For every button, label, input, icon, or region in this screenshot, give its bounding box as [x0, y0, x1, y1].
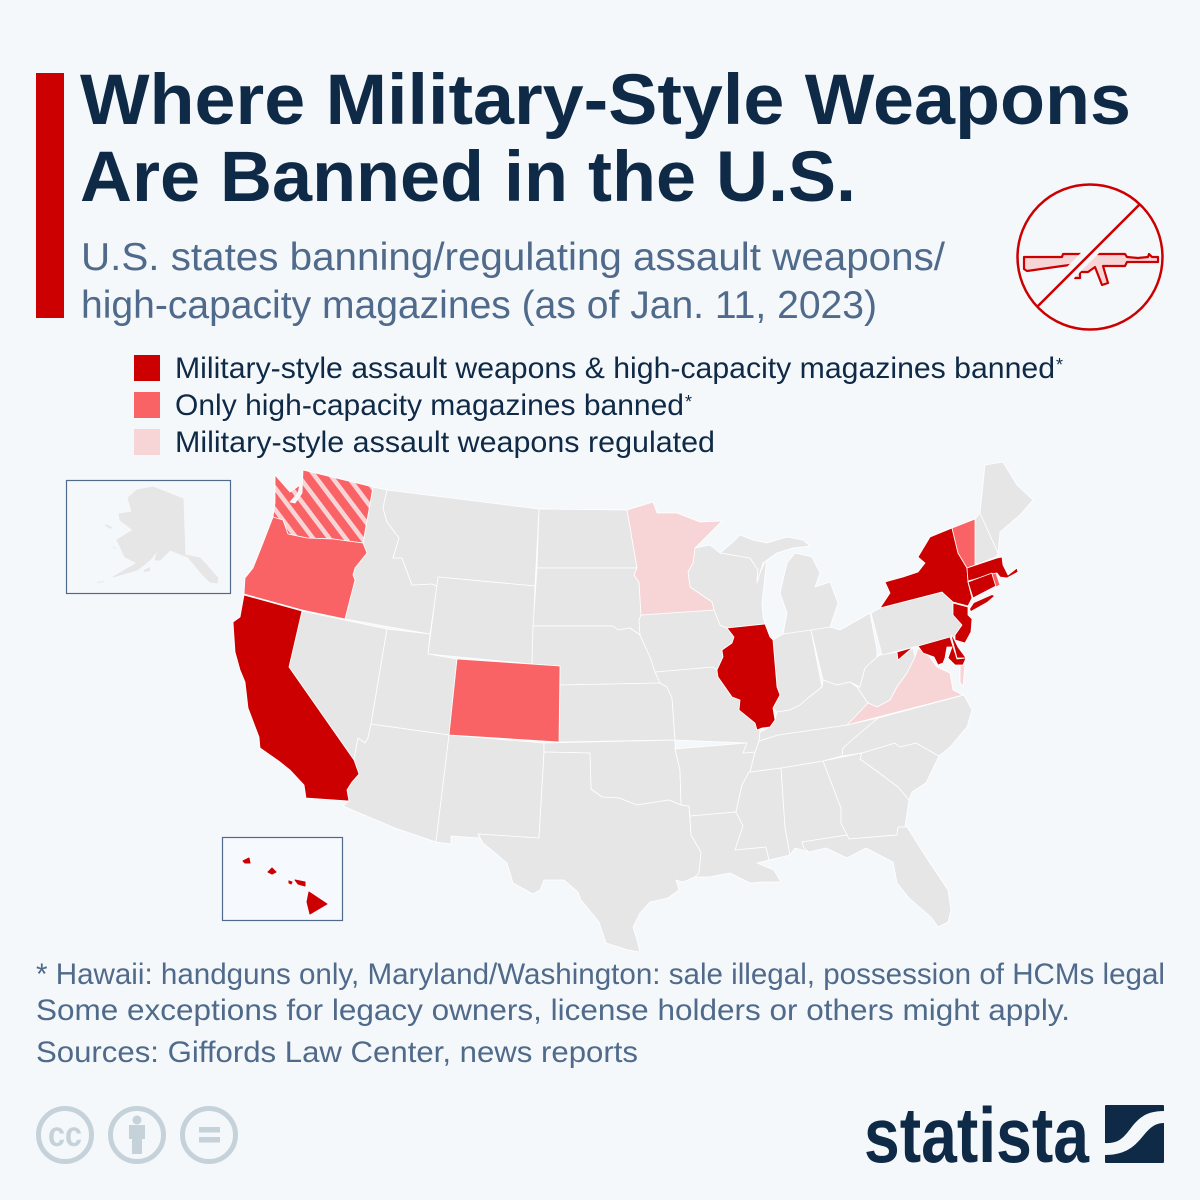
icon: banned rifle: [1018, 184, 1162, 330]
title: Are Banned in the U.S.: [80, 138, 856, 217]
state: Vermont: [952, 519, 975, 568]
title accent bar: [36, 73, 64, 318]
state: Minnesota: [627, 502, 722, 615]
subtitle: high-capacity magazines (as of Jan. 11, 2023): [81, 284, 877, 327]
state: Colorado: [449, 659, 560, 742]
logo: statista: statista: [864, 1091, 1090, 1179]
legend: [134, 352, 1063, 459]
state: New Jersey: [953, 603, 972, 643]
state: Delaware: [951, 635, 966, 658]
Virginia eastern shore: [960, 665, 965, 687]
states without a ban: [289, 462, 1033, 952]
legend item: assault weapons and magazines banned: Military-style assault weapons & high-capacity magazines banned: [175, 352, 1055, 385]
legend item: assault weapons and magazines banned: *: [1056, 355, 1063, 375]
inset: Alaska: [66, 480, 230, 594]
legend item: only magazines banned: Only high-capacity magazines banned: [175, 389, 684, 422]
footnotes: Sources: Giffords Law Center, news reports: [36, 1036, 638, 1069]
title: Where Military-Style Weapons: [80, 61, 1131, 140]
icon: no derivatives: [182, 1108, 236, 1162]
icon: creative commons: [38, 1108, 92, 1162]
subtitle: [81, 236, 945, 327]
map: contiguous United States: [233, 462, 1033, 952]
state: California: [233, 595, 359, 801]
subtitle: U.S. states banning/regulating assault weapons/: [81, 236, 945, 279]
footnotes: Some exceptions for legacy owners, license holders or others might apply.: [36, 994, 1070, 1027]
state: Washington (hatched): [273, 470, 373, 543]
Long Island: [970, 595, 994, 611]
footnotes: * Hawaii: handguns only, Maryland/Washington: sale illegal, possession of HCMs legal: [36, 958, 1165, 991]
state: Rhode Island: [992, 573, 1000, 587]
state: New York: [880, 528, 972, 608]
footnotes: [36, 958, 1165, 1069]
state: Illinois: [717, 624, 780, 730]
state: Virginia: [847, 648, 963, 725]
state: Connecticut: [968, 573, 996, 598]
icon: creative commons: cc: [48, 1115, 82, 1154]
legend item: assault weapons regulated: Military-style assault weapons regulated: [175, 426, 715, 459]
state: Massachusetts: [967, 557, 1018, 581]
icon: attribution: [110, 1108, 164, 1162]
inset: Hawaii: [222, 838, 342, 920]
title: [80, 61, 1131, 217]
state: Maryland: [897, 637, 966, 665]
legend item: only magazines banned: *: [685, 392, 692, 412]
state: Oregon: [244, 517, 367, 619]
